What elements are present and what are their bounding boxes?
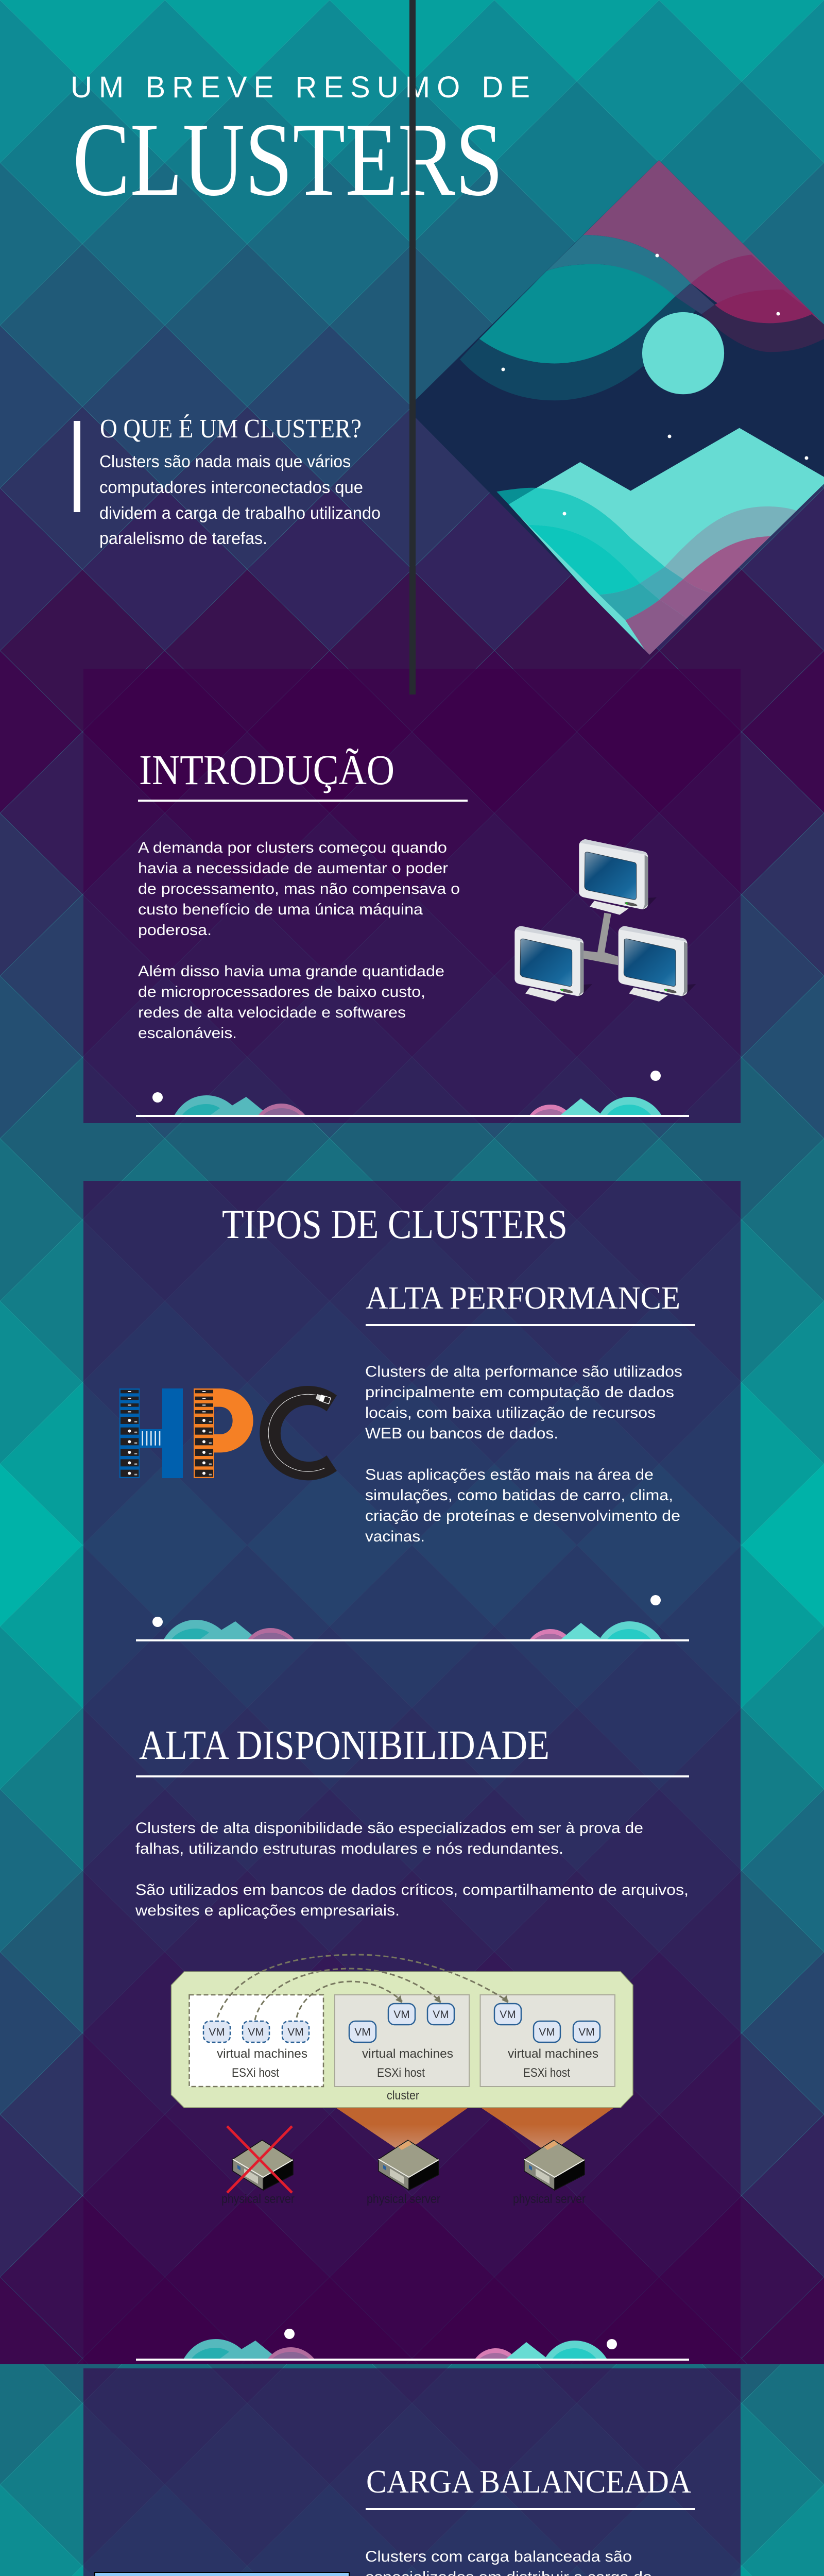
definition text: computadores interconectados que — [99, 478, 363, 497]
text: alta performance: Suas aplicações estão mais na área de — [365, 1466, 654, 1483]
text: alta performance: simulações, como batidas de carro, clima, — [365, 1487, 673, 1504]
illustration: stars in hero — [502, 253, 809, 515]
host labels — [217, 2047, 598, 2103]
host labels: virtual machines — [362, 2047, 453, 2061]
host 3 — [480, 1995, 615, 2087]
failover arrows — [217, 1955, 508, 2020]
text: introdução: A demanda por clusters começou quando — [138, 839, 447, 856]
physical servers — [233, 2140, 585, 2190]
title line: um breve resumo de: UM BREVE RESUMO DE — [71, 71, 530, 104]
VM labels: VM — [539, 2026, 555, 2038]
heading: alta performance: ALTA PERFORMANCE — [366, 1281, 680, 1316]
text: carga balanceada — [365, 2548, 693, 2576]
logo: HPC — [119, 1386, 337, 1480]
definition text: dividem a carga de trabalho utilizando — [99, 503, 381, 522]
text: introdução — [138, 839, 460, 1042]
text: carga balanceada: Clusters com carga balanceada são — [365, 2548, 632, 2565]
text: alta performance — [365, 1363, 682, 1545]
host labels: cluster — [387, 2089, 419, 2103]
decoration: hills and divider — [136, 2329, 689, 2361]
definition text: paralelismo de tarefas. — [99, 529, 267, 548]
main title: clusters: CLUSTERS — [73, 101, 503, 218]
text: alta performance: Clusters de alta performance são utilizados — [365, 1363, 682, 1380]
text: alta performance: principalmente em computação de dados — [365, 1384, 674, 1401]
diagram: load balancer — [95, 2572, 349, 2576]
heading: O QUE É UM CLUSTER? — [100, 414, 362, 444]
definition text: Clusters são nada mais que vários — [99, 452, 351, 471]
VM labels: VM — [393, 2009, 410, 2021]
host labels: virtual machines — [508, 2047, 598, 2061]
VM labels: VM — [209, 2026, 225, 2038]
illustration: hero landscape in diamond — [410, 156, 824, 657]
text: introdução: redes de alta velocidade e softwares — [138, 1004, 406, 1021]
VM labels: VM — [578, 2026, 595, 2038]
server labels: physical server — [221, 2192, 295, 2206]
text: introdução: escalonáveis. — [138, 1025, 237, 1042]
host 2 — [335, 1995, 469, 2087]
logo letter P — [194, 1388, 253, 1478]
server labels: physical server — [367, 2192, 440, 2206]
text: alta performance: WEB ou bancos de dados. — [365, 1425, 558, 1442]
text: alta performance: criação de proteínas e desenvolvimento de — [365, 1507, 680, 1524]
VM labels: VM — [500, 2009, 516, 2021]
panel: tipos de clusters — [83, 1181, 741, 2364]
logo letter H — [119, 1388, 183, 1478]
failed host — [190, 1995, 323, 2087]
text: introdução: Além disso havia uma grande quantidade — [138, 963, 444, 980]
host labels: ESXi host — [232, 2066, 279, 2080]
text: introdução: poderosa. — [138, 922, 212, 939]
diagram: VMware HA cluster — [171, 1955, 633, 2206]
vertical bar — [409, 0, 416, 694]
text: alta disponibilidade: falhas, utilizando estruturas modulares e nós redundantes. — [135, 1840, 563, 1857]
VM labels — [209, 2009, 595, 2038]
server labels: physical server — [513, 2192, 586, 2206]
VM labels: VM — [433, 2009, 449, 2021]
load balancer box — [95, 2572, 349, 2576]
icon: network of three computers — [514, 839, 696, 1002]
hero title — [71, 71, 530, 218]
heading: introdução: INTRODUÇÃO — [139, 746, 394, 793]
text: introdução: custo benefício de uma única máquina — [138, 901, 423, 918]
text: alta disponibilidade — [135, 1820, 689, 1919]
VM labels: VM — [248, 2026, 264, 2038]
host labels: ESXi host — [377, 2066, 425, 2080]
text: introdução: havia a necessidade de aumentar o poder — [138, 860, 448, 877]
text: alta performance: locais, com baixa utilização de recursos — [365, 1404, 656, 1421]
decoration: hills and divider — [136, 1071, 689, 1117]
text: alta disponibilidade: Clusters de alta disponibilidade são especializados em ser à prova de — [135, 1820, 643, 1837]
heading: alta disponibilidade: ALTA DISPONIBILIDADE — [139, 1723, 550, 1768]
resource beams — [336, 2108, 614, 2149]
heading: carga balanceada: CARGA BALANCEADA — [366, 2463, 691, 2500]
panel: carga balanceada — [83, 2368, 741, 2576]
arrowheads — [396, 1995, 508, 2003]
accent bar — [74, 421, 80, 512]
decoration: hills and divider — [136, 1595, 689, 1641]
text: alta disponibilidade: São utilizados em bancos de dados críticos, compartilhamento de arquivos, — [135, 1882, 689, 1899]
cluster panel — [171, 1972, 633, 2108]
server labels — [221, 2192, 586, 2206]
heading: tipos de clusters: TIPOS DE CLUSTERS — [222, 1202, 568, 1247]
failure cross — [227, 2126, 292, 2193]
text: alta disponibilidade: websites e aplicações empresariais. — [135, 1902, 400, 1919]
VM labels: VM — [354, 2026, 371, 2038]
background: diamond lattice middle section — [0, 2364, 824, 2576]
host labels: ESXi host — [523, 2066, 570, 2080]
logo letter C with cable — [260, 1386, 337, 1480]
text: alta performance: vacinas. — [365, 1528, 425, 1545]
text: introdução: de processamento, mas não compensava o — [138, 880, 460, 897]
virtual machine boxes — [203, 2004, 600, 2042]
VM labels: VM — [287, 2026, 304, 2038]
definition text — [99, 452, 381, 548]
text: introdução: de microprocessadores de baixo custo, — [138, 984, 425, 1001]
intro: o que é um cluster — [74, 414, 381, 548]
host labels: virtual machines — [217, 2047, 307, 2061]
panel: introdução — [83, 669, 741, 1123]
